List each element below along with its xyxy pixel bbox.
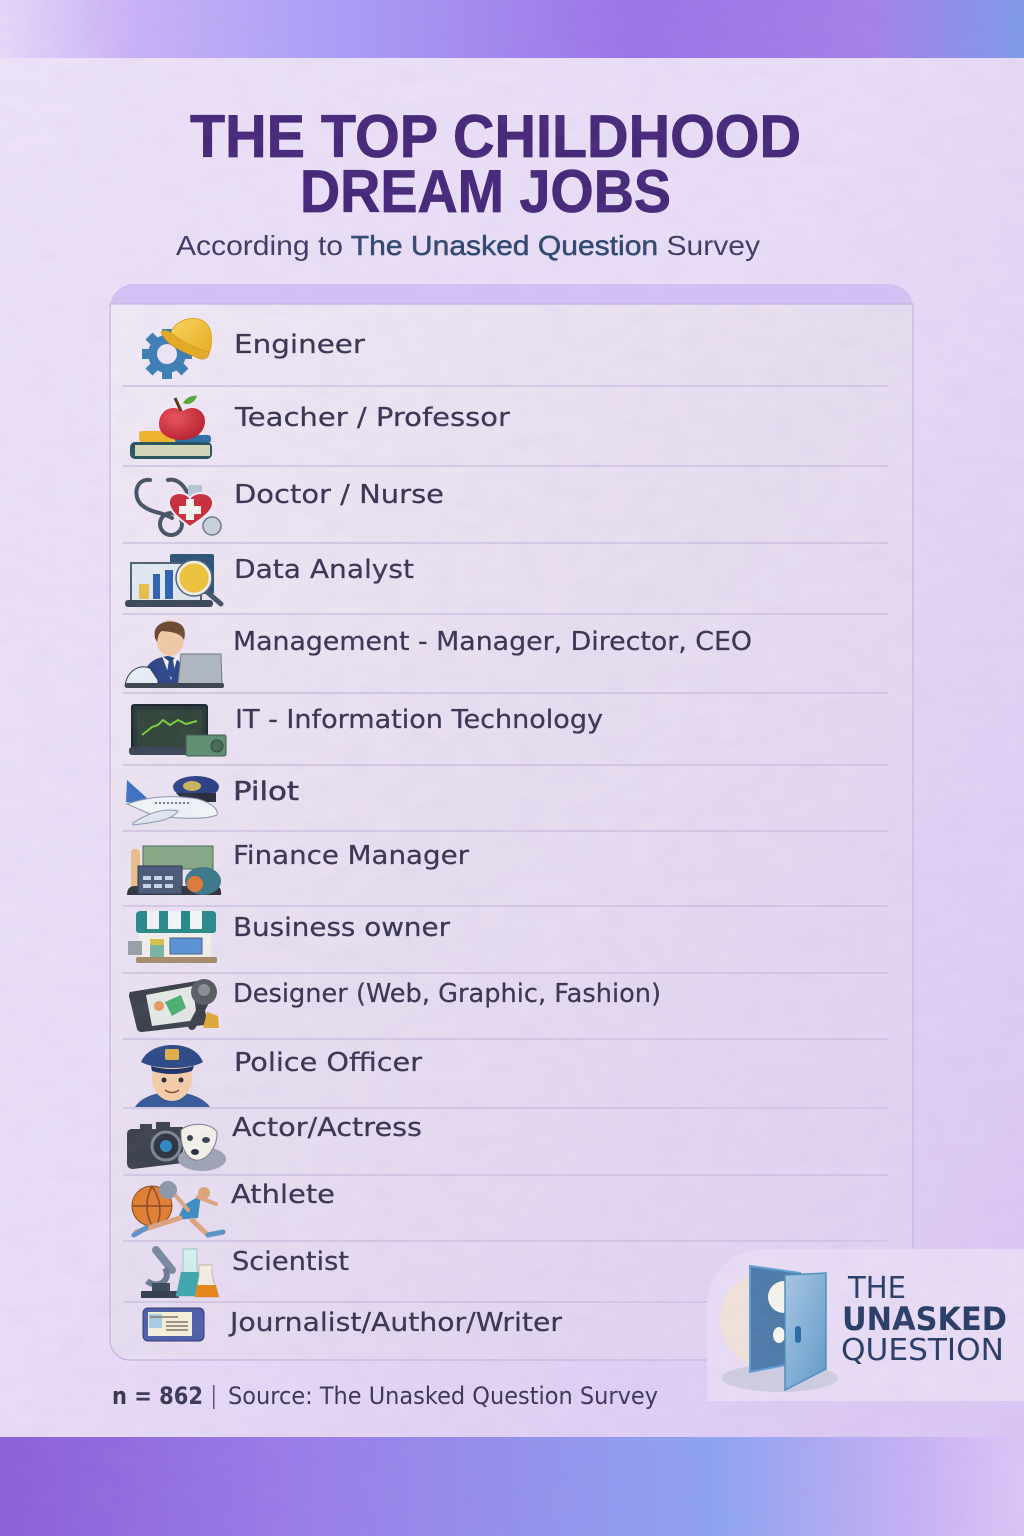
logo wordmark: [841, 1271, 1007, 1368]
icon: police officer: [135, 1045, 210, 1107]
logo wordmark: THE: [847, 1271, 906, 1306]
icon: stethoscope and heart: [136, 480, 221, 535]
label: Teacher / Professor: [234, 403, 510, 433]
label: Management - Manager, Director, CEO: [233, 627, 752, 657]
panel header strip: [110, 284, 913, 310]
title: DREAM JOBS: [300, 158, 671, 225]
top colour band: [0, 0, 1024, 58]
title: [190, 103, 801, 225]
panel shadow: [110, 310, 913, 362]
subtitle: According to The Unasked Question Survey: [176, 230, 760, 261]
icon: storefront: [128, 911, 217, 963]
label: Pilot: [233, 777, 299, 807]
label: Finance Manager: [233, 841, 469, 871]
label: Police Officer: [234, 1048, 422, 1078]
panel body: [110, 304, 913, 1360]
logo badge: [707, 1249, 1024, 1401]
icon: athlete and basketball: [132, 1181, 223, 1235]
icon: open door: [720, 1266, 838, 1392]
icon: money and calculator: [127, 846, 221, 895]
icon: laptop with code: [129, 705, 226, 756]
footer source note: n = 862: [112, 1382, 203, 1410]
title: THE TOP CHILDHOOD: [190, 103, 801, 170]
label: Engineer: [234, 330, 365, 360]
icon: digital document: [143, 1308, 204, 1341]
label: Journalist/Author/Writer: [228, 1308, 562, 1338]
label: Actor/Actress: [232, 1113, 422, 1143]
icon: apple on books: [130, 396, 212, 459]
icon: camera and mask: [127, 1122, 226, 1171]
panel: job list: [110, 284, 913, 1360]
label: Designer (Web, Graphic, Fashion): [233, 979, 661, 1009]
icon: laptop with chart and magnifier: [125, 554, 221, 607]
icon: manager at laptop: [125, 620, 224, 688]
label: IT - Information Technology: [235, 705, 603, 735]
label: Doctor / Nurse: [234, 480, 444, 510]
label: Business owner: [233, 913, 450, 943]
footer source note: Source: The Unasked Question Survey: [228, 1382, 658, 1410]
label: Data Analyst: [234, 555, 414, 585]
icon: microscope and flasks: [141, 1249, 219, 1298]
label: Athlete: [231, 1180, 335, 1210]
logo wordmark: UNASKED: [842, 1300, 1007, 1338]
bottom colour band: [0, 1437, 1024, 1536]
icon: design tablet and microphone: [129, 979, 219, 1032]
label: Scientist: [232, 1247, 349, 1277]
icon: plane and pilot cap: [126, 776, 219, 825]
icon: gear and hard hat: [142, 318, 212, 379]
logo wordmark: QUESTION: [841, 1333, 1004, 1368]
